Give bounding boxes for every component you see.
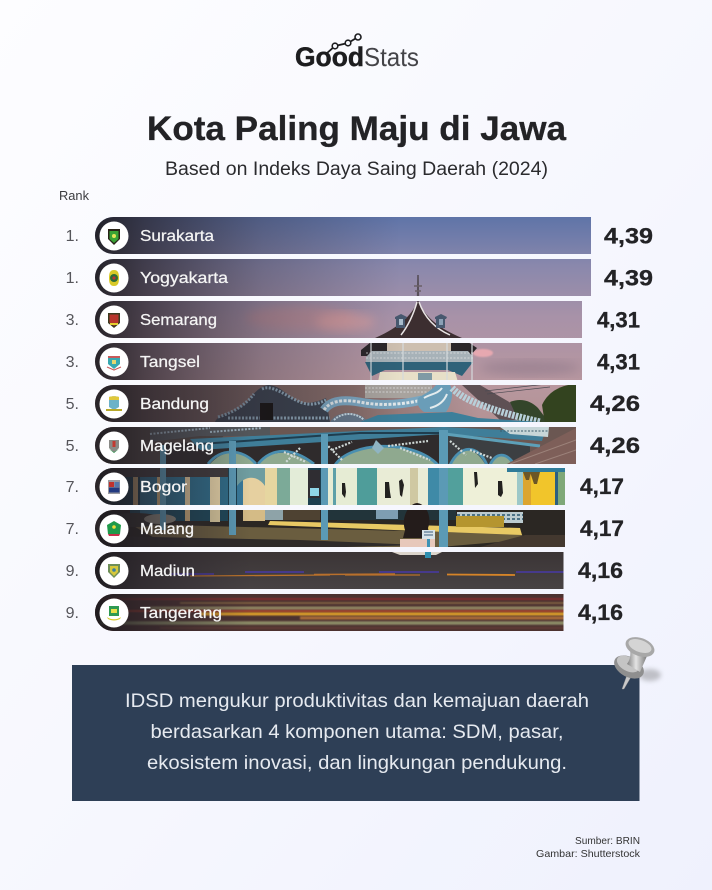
row 1: Surakarta — [66, 222, 653, 250]
source credits: Sumber: BRIN — [575, 835, 640, 847]
row 3: Semarang — [66, 306, 640, 334]
row 6 dark background — [100, 427, 580, 467]
road — [95, 552, 564, 589]
row 6: Magelang — [66, 432, 640, 460]
row 1: Surakarta: Surakarta — [140, 228, 214, 245]
tower body — [361, 343, 477, 356]
row 10: Tangerang — [66, 598, 623, 628]
dragon head — [417, 385, 452, 412]
subtitle: Based on Indeks Daya Saing Daerah (2024) — [165, 159, 548, 180]
spire and tower roof — [417, 275, 419, 300]
row 9: Madiun: 9. — [66, 563, 79, 580]
logo: GoodStats: Good — [295, 42, 364, 72]
icon: Tangsel crest — [107, 356, 121, 370]
photo bars: city ranking bars filled with palace photograph — [90, 210, 600, 640]
row 10: Tangerang: 4,16 — [578, 600, 623, 625]
source credits: Gambar: Shutterstock — [536, 848, 641, 860]
icon: Madiun crest — [108, 564, 120, 578]
row 5: Bandung: 4,26 — [590, 391, 640, 416]
row 3: Semarang: 3. — [66, 312, 79, 329]
row 2: Yogyakarta: Yogyakarta — [140, 270, 228, 287]
row 9: Madiun: Madiun — [140, 563, 195, 580]
row 4: Tangsel — [66, 348, 640, 376]
logo: GoodStats — [295, 34, 419, 72]
row 3: Semarang: 4,31 — [597, 308, 640, 332]
icon: Bandung crest — [106, 396, 122, 411]
row 6: Magelang: Magelang — [140, 438, 214, 455]
title: Kota Paling Maju di Jawa — [147, 110, 567, 148]
icon: Bogor crest — [108, 480, 120, 494]
row 6: Magelang: 4,26 — [590, 433, 640, 458]
row 8: Malang: 4,17 — [580, 516, 624, 541]
callout panel — [72, 665, 640, 801]
row 1: Surakarta: 4,39 — [604, 224, 653, 248]
carved crest — [215, 385, 330, 422]
row 8: Malang: Malang — [140, 521, 194, 538]
row 2: Yogyakarta — [66, 264, 653, 292]
logo: GoodStats: Stats — [364, 42, 419, 72]
row 4: Tangsel: 4,31 — [597, 350, 640, 374]
rank column heading: Rank — [59, 189, 90, 203]
statue and sign — [403, 503, 430, 538]
row 9: Madiun — [66, 556, 623, 586]
row 8: Malang — [66, 514, 624, 544]
row 7: Bogor — [66, 472, 624, 502]
ground floor level — [100, 510, 570, 548]
row 8: Malang: 7. — [66, 521, 79, 538]
row 5: Bandung: Bandung — [140, 396, 209, 413]
row 9: Madiun: 4,16 — [578, 558, 623, 583]
right descending ornament — [452, 388, 540, 422]
light trails — [95, 594, 564, 631]
row 3: Semarang: Semarang — [140, 312, 217, 329]
side roof and trees — [462, 385, 518, 420]
row 1: Surakarta: 1. — [66, 228, 79, 245]
icon: Malang crest — [107, 521, 121, 536]
row 10: Tangerang: 9. — [66, 605, 79, 622]
row 5: Bandung: 5. — [66, 396, 79, 413]
callout panel: IDSD mengukur produktivitas dan kemajuan daerah — [125, 690, 589, 712]
icon: push pin — [610, 633, 661, 689]
left darkening — [95, 217, 380, 422]
row 10: Tangerang: Tangerang — [140, 605, 222, 622]
spandrel and arch band — [162, 434, 439, 464]
icon: Magelang crest — [109, 440, 119, 453]
callout panel: ekosistem inovasi, dan lingkungan pendukung. — [147, 752, 567, 774]
dragon body — [324, 400, 422, 410]
row 7: Bogor: 7. — [66, 479, 79, 496]
row 5: Bandung — [66, 390, 640, 418]
row 5 dusk background — [100, 385, 460, 422]
row 4: Tangsel: 3. — [66, 354, 79, 371]
callout panel: berdasarkan 4 komponen utama: SDM, pasar, — [150, 721, 564, 743]
row 2: Yogyakarta: 4,39 — [604, 266, 653, 290]
row 7: Bogor: Bogor — [140, 479, 188, 496]
facade level with doors — [100, 468, 321, 505]
source credits — [536, 835, 641, 860]
row 7: Bogor: 4,17 — [580, 474, 624, 499]
icon: Tangerang crest — [107, 606, 121, 620]
ground and yellow ledge — [130, 524, 523, 547]
icon: Surakarta crest — [108, 229, 120, 245]
sloped teal beams — [190, 427, 545, 450]
icon: Yogyakarta crest — [109, 270, 119, 286]
row 2: Yogyakarta: 1. — [66, 270, 79, 287]
facade columns — [160, 430, 448, 547]
icon: Semarang crest — [108, 313, 120, 328]
row 4: Tangsel: Tangsel — [140, 354, 200, 371]
row 6: Magelang: 5. — [66, 438, 79, 455]
